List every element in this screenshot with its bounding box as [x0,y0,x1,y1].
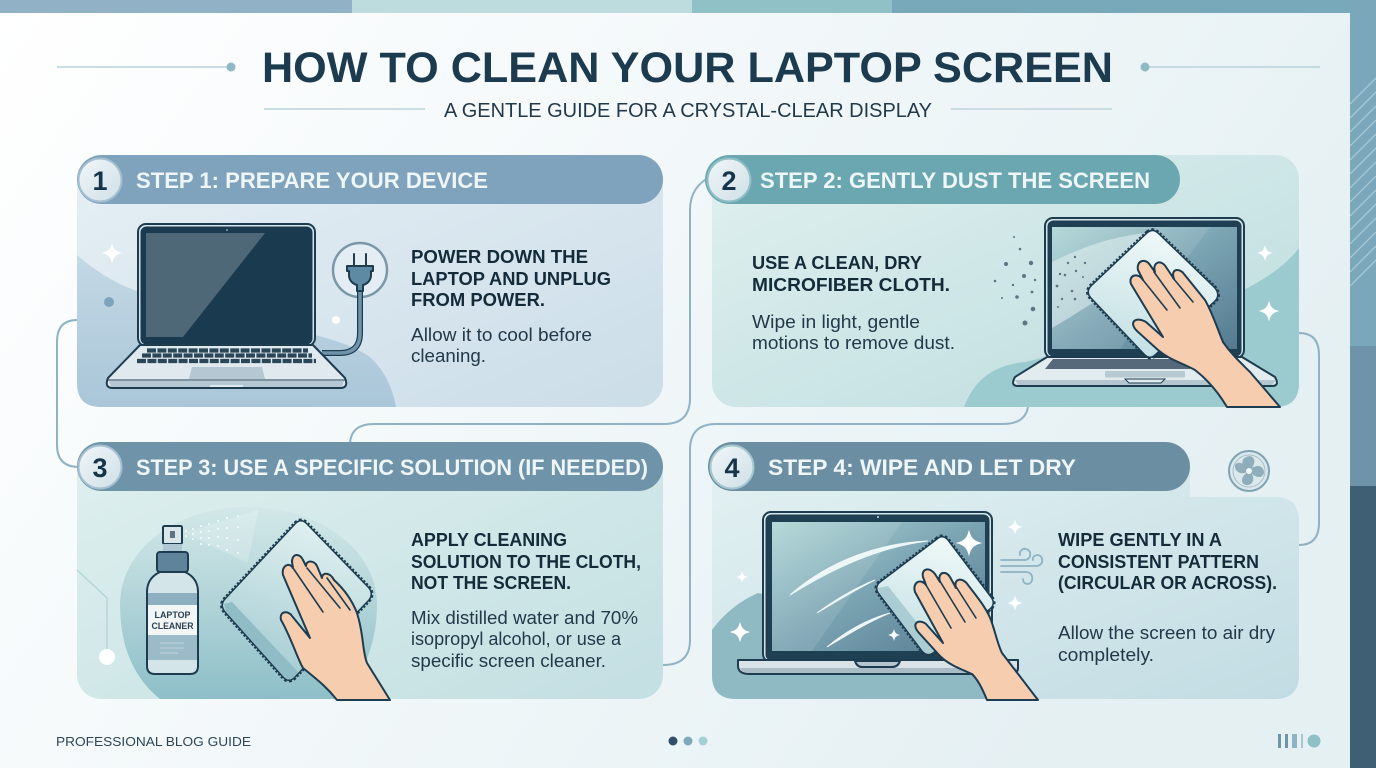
text: step 2 instructions: motions to remove dust. [752,333,955,353]
text: step 2 instructions [752,253,955,353]
panel: step 2 [705,155,1299,407]
icon: fan [1229,451,1269,491]
title: HOW TO CLEAN YOUR LAPTOP SCREEN [262,44,1113,92]
heading pill: STEP 3: USE A SPECIFIC SOLUTION (IF NEEDED) [136,455,648,480]
panel: step 1 [77,155,663,407]
heading pill: STEP 2: GENTLY DUST THE SCREEN [760,168,1150,193]
footer label: PROFESSIONAL BLOG GUIDE [56,734,251,749]
footer bars icon [1278,734,1320,748]
text: step 1 instructions: LAPTOP AND UNPLUG [411,269,611,289]
text: step 4 instructions: CONSISTENT PATTERN [1058,552,1259,572]
title left rule [57,62,236,72]
heading pill: 1 [92,166,108,196]
right colour band [1350,0,1376,768]
pagination dots [668,736,708,746]
icon: plug and cable [322,243,387,353]
sparkles [730,520,1022,642]
text: step 4 instructions [1058,530,1277,665]
heading pill: 2 [721,166,737,196]
icon: spray bottle [147,526,198,674]
text: step 4 instructions: completely. [1058,645,1154,665]
background blob [964,248,1299,407]
icon: spray bottle: CLEANER [152,621,194,632]
text: step 1 instructions: Allow it to cool before [411,325,592,345]
subtitle: A GENTLE GUIDE FOR A CRYSTAL-CLEAR DISPLAY [444,99,932,122]
panel: step 3 [77,442,663,700]
background blob [712,593,1005,699]
dust particles [994,236,1086,326]
top colour band [0,0,1376,14]
text: step 4 instructions: WIPE GENTLY IN A [1058,530,1222,550]
icon: hand [1130,261,1280,407]
icon: wind [1001,549,1042,584]
heading pill [705,155,1180,204]
connector: step 2 to step 4 [663,407,1028,665]
title right rule [1140,62,1320,72]
text: step 3 instructions: Mix distilled water and 70% [411,608,638,628]
spray mist [185,510,258,563]
icon: laptop [738,512,1018,674]
icon: laptop [107,224,346,388]
text: step 3 instructions: isopropyl alcohol, or use a [411,629,622,649]
background circle [120,507,377,699]
heading pill [77,155,663,204]
text: step 3 instructions: APPLY CLEANING [411,530,567,550]
heading pill: 4 [724,453,740,483]
text: step 3 instructions [411,530,641,671]
text: step 3 instructions: NOT THE SCREEN. [411,573,571,593]
background blob [77,255,396,407]
text: step 1 instructions: FROM POWER. [411,290,545,310]
connector: step 2 to step 4 right side [1299,333,1319,545]
icon: spray bottle: LAPTOP [154,610,191,621]
text: step 2 instructions: USE A CLEAN, DRY [752,253,922,273]
panel: step 4 [708,442,1299,700]
connector: step 1 to step 3 [57,320,79,467]
text: step 2 instructions: MICROFIBER CLOTH. [752,275,950,295]
text: step 3 instructions: specific screen cleaner. [411,651,606,671]
panel background [712,470,1299,699]
heading pill [708,442,1190,491]
text: step 3 instructions: SOLUTION TO THE CLOTH, [411,552,641,572]
text: step 4 instructions: (CIRCULAR OR ACROSS). [1058,573,1277,593]
panel background [712,155,1299,407]
connector: step 3 to step 2 [350,176,712,442]
subtitle rules [264,108,1112,110]
sparkle and dots [102,242,340,324]
heading pill: STEP 4: WIPE AND LET DRY [768,455,1076,480]
heading pill: STEP 1: PREPARE YOUR DEVICE [136,168,488,193]
text: step 1 instructions: cleaning. [411,346,486,366]
sparkles [1257,245,1280,322]
text: step 2 instructions: Wipe in light, gentle [752,312,920,332]
decorative line and dot [77,570,115,665]
icon: microfiber cloth [1089,231,1217,356]
text: step 1 instructions: POWER DOWN THE [411,247,588,267]
icon: hand [281,555,390,700]
icon: hand [914,569,1038,700]
text: step 4 instructions: Allow the screen to air dry [1058,623,1275,643]
heading pill: 3 [92,453,108,483]
icon: cloth [223,522,370,680]
panel background [77,442,663,699]
text: step 1 instructions [411,247,611,366]
heading pill [77,442,663,491]
icon: laptop [1013,218,1277,386]
icon: cloth [878,538,992,654]
panel background [77,155,663,407]
